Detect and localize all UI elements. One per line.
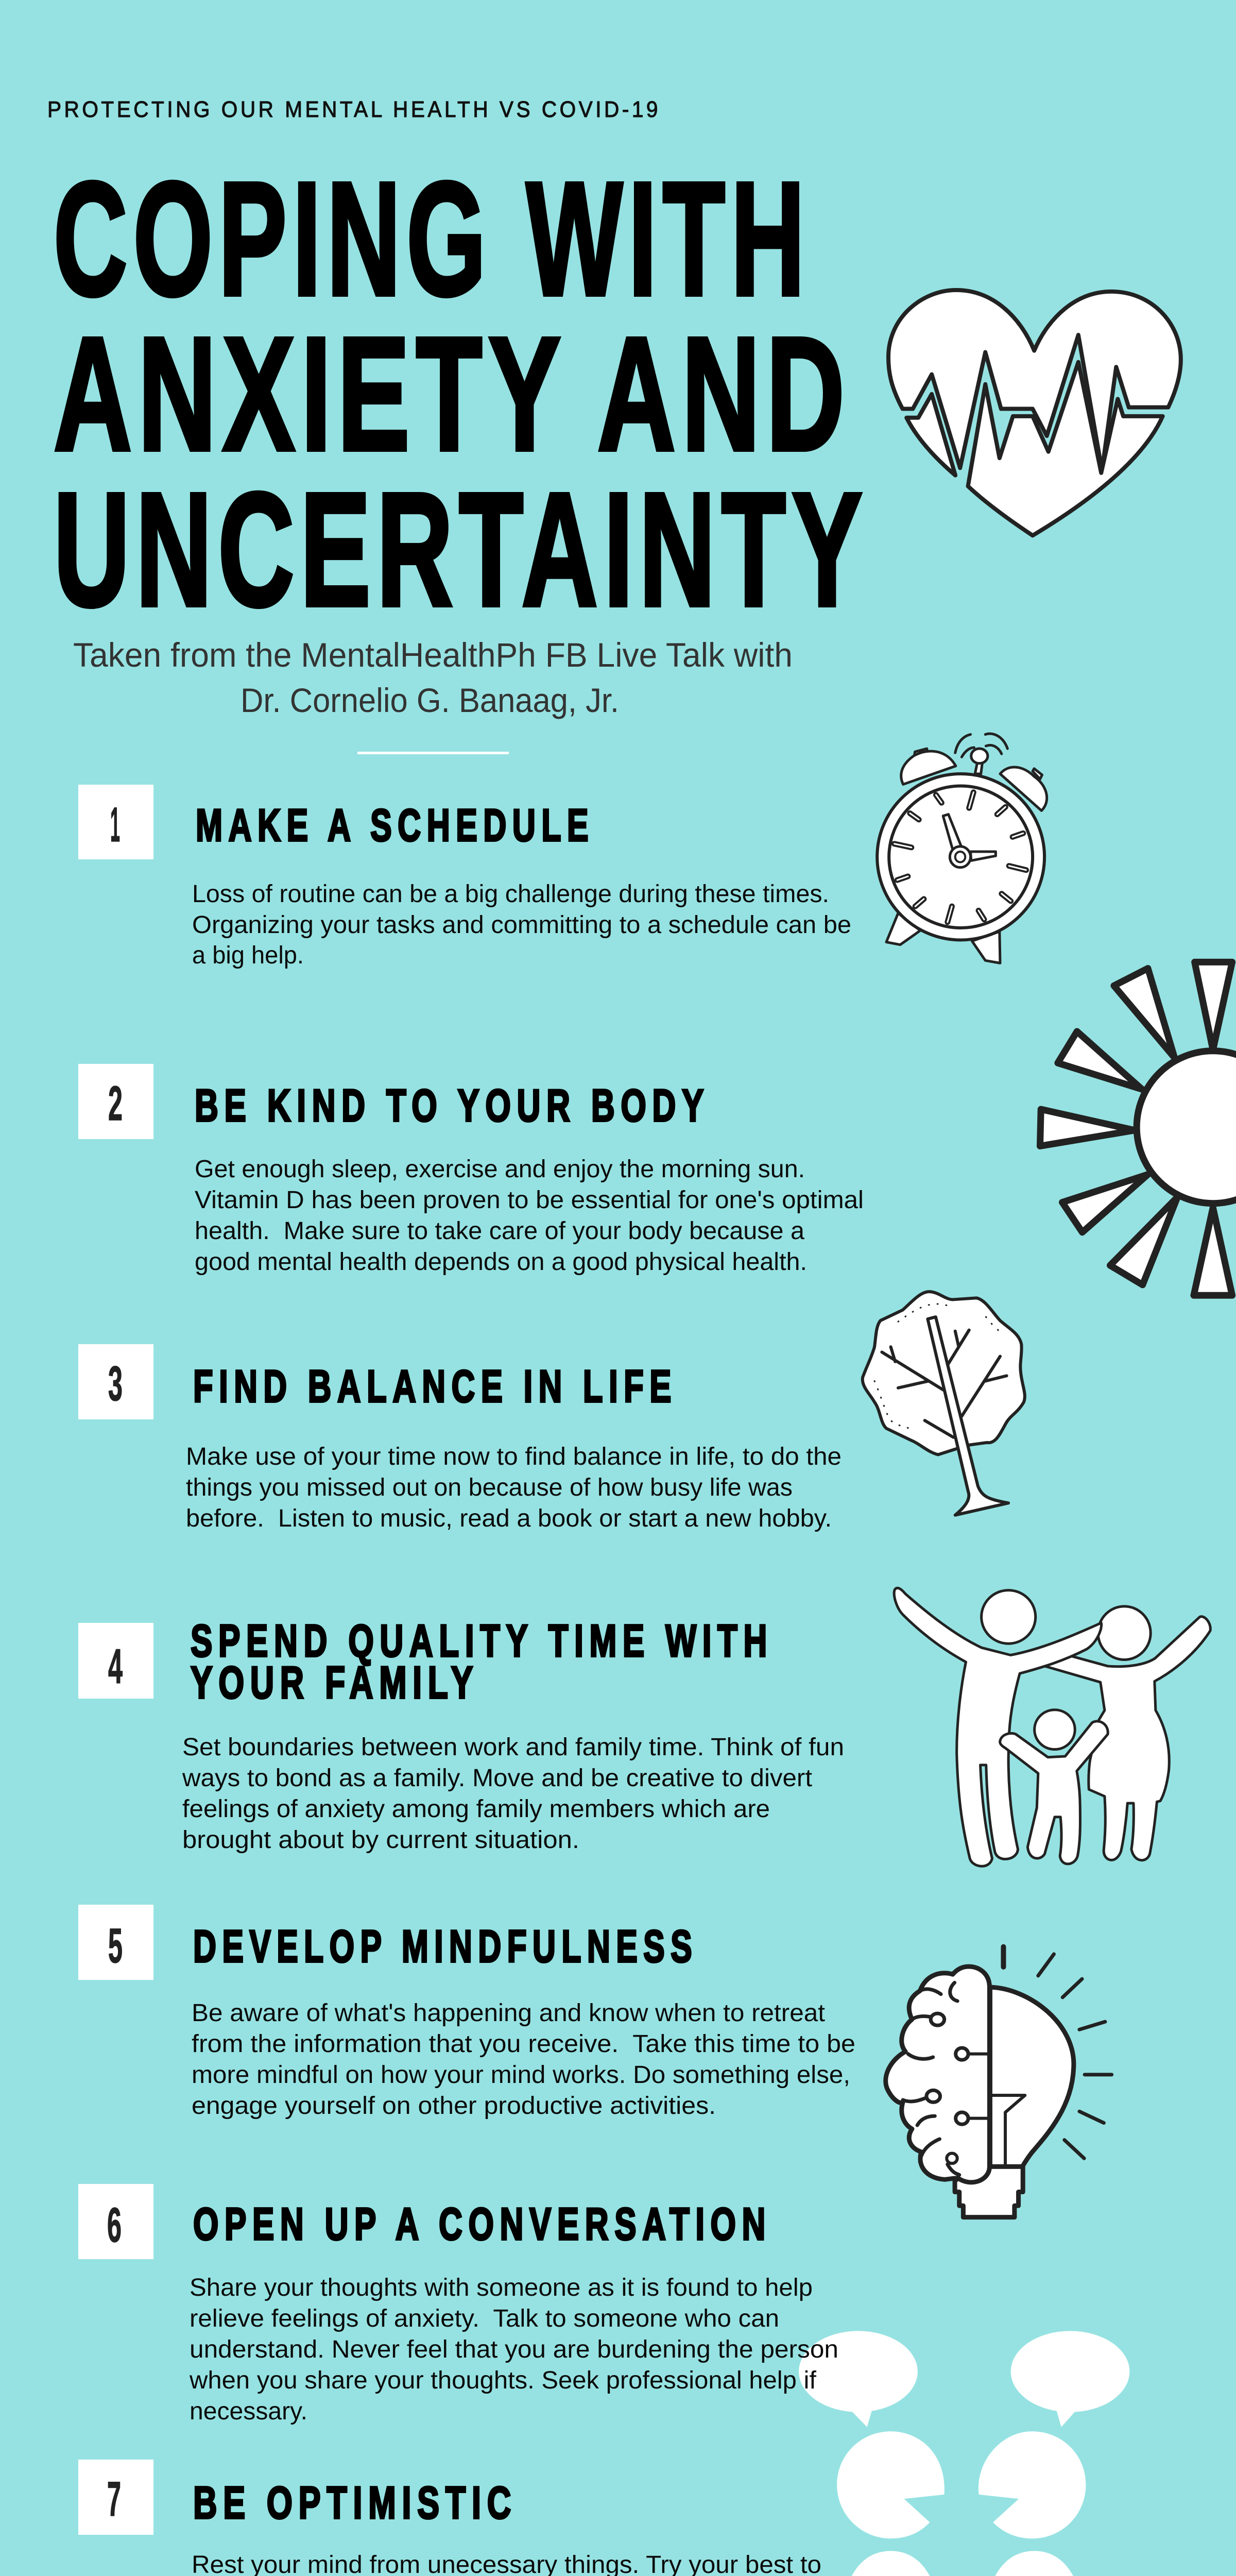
number badge 6: 6 (107, 2198, 122, 2252)
body text 6: Share your thoughts with someone as it is found to help (190, 2274, 813, 2301)
panel: step 7 be optimistic (78, 2460, 821, 2576)
number badge 4 (78, 1623, 153, 1699)
body text 2: good mental health depends on a good physical health. (195, 1248, 807, 1276)
body text 2: Get enough sleep, exercise and enjoy the morning sun. (195, 1156, 805, 1183)
number badge 1 (78, 785, 153, 859)
heading 3: FIND BALANCE IN LIFE (193, 1361, 677, 1412)
body text 6: necessary. (190, 2398, 307, 2425)
heading 4: SPEND QUALITY TIME WITH (191, 1615, 773, 1666)
heading 2: BE KIND TO YOUR BODY (195, 1080, 710, 1131)
panel: step 6 open up a conversation (78, 2184, 1129, 2576)
panel: step 2 be kind to your body (78, 962, 1236, 1295)
number badge 5 (78, 1905, 153, 1980)
body text 5: more mindful on how your mind works. Do something else, (192, 2061, 850, 2089)
heading 4: YOUR FAMILY (191, 1657, 479, 1708)
title: COPING WITH (54, 148, 811, 329)
eyebrow heading: PROTECTING OUR MENTAL HEALTH VS COVID-19 (47, 97, 661, 122)
heading 1: MAKE A SCHEDULE (196, 800, 594, 851)
panel: step 3 find balance in life (78, 1292, 1025, 1532)
body text 6: when you share your thoughts. Seek professional help if (189, 2367, 817, 2394)
number badge 6 (78, 2184, 153, 2259)
body text 6 (189, 2274, 838, 2425)
icon: heart with heartbeat (888, 290, 1181, 535)
body text 4: Set boundaries between work and family time. Think of fun (182, 1734, 844, 1761)
number badge 7: 7 (107, 2472, 121, 2527)
icon: two people talking (799, 2331, 1129, 2576)
body text 1: a big help. (192, 942, 304, 969)
heading 5: DEVELOP MINDFULNESS (193, 1921, 698, 1972)
number badge 2 (78, 1064, 153, 1139)
body text 6: relieve feelings of anxiety. Talk to someone who can (190, 2305, 779, 2332)
subtitle: Dr. Cornelio G. Banaag, Jr. (241, 681, 619, 719)
body text 6: understand. Never feel that you are burdening the person (190, 2336, 838, 2363)
body text 1: Organizing your tasks and committing to a schedule can be (192, 911, 851, 939)
body text 4: ways to bond as a family. Move and be creative to divert (182, 1765, 812, 1792)
icon: sun (1040, 962, 1236, 1295)
number badge 1: 1 (110, 798, 120, 852)
body text 4: brought about by current situation. (182, 1826, 579, 1854)
body text 5: Be aware of what's happening and know when to retreat (192, 1999, 825, 2027)
body text 3: before. Listen to music, read a book or start a new hobby. (186, 1505, 832, 1532)
panel: step 4 spend quality time with your family (78, 1588, 1210, 1866)
body text 2: health. Make sure to take care of your body because a (195, 1217, 804, 1245)
panel: step 5 develop mindfulness (78, 1905, 1112, 2217)
icon: tree (863, 1292, 1025, 1515)
number badge 2: 2 (108, 1076, 123, 1131)
title (54, 148, 868, 640)
body text 2: Vitamin D has been proven to be essential for one's optimal (195, 1187, 864, 1214)
body text 4 (182, 1734, 844, 1854)
number badge 5: 5 (108, 1919, 123, 1973)
icon: family (894, 1588, 1210, 1866)
subtitle: Taken from the MentalHealthPh FB Live Talk with (73, 636, 793, 674)
body text 5: engage yourself on other productive activities. (192, 2092, 716, 2120)
icon: brain light bulb (886, 1947, 1112, 2217)
body text 4: feelings of anxiety among family members which are (182, 1795, 770, 1823)
body text 3 (186, 1443, 842, 1532)
number badge 4: 4 (108, 1639, 123, 1694)
body text 5: from the information that you receive. Take this time to be (192, 2030, 855, 2058)
body text 3: things you missed out on because of how busy life was (186, 1474, 793, 1501)
panel: step 1 make a schedule (78, 734, 1047, 969)
title: ANXIETY AND (54, 303, 851, 484)
body text 1 (192, 880, 851, 969)
heading 4 (191, 1615, 773, 1708)
heading 6: OPEN UP A CONVERSATION (193, 2198, 771, 2249)
body text 1: Loss of routine can be a big challenge during these times. (192, 880, 829, 908)
number badge 3 (78, 1344, 153, 1419)
subtitle (73, 636, 793, 719)
heading 7: BE OPTIMISTIC (193, 2477, 517, 2528)
body text 2 (195, 1156, 864, 1276)
number badge 7 (78, 2460, 153, 2535)
body text 3: Make use of your time now to find balance in life, to do the (186, 1443, 842, 1470)
icon: alarm clock (877, 734, 1047, 963)
number badge 3: 3 (108, 1357, 123, 1411)
body text 5 (192, 1999, 855, 2120)
